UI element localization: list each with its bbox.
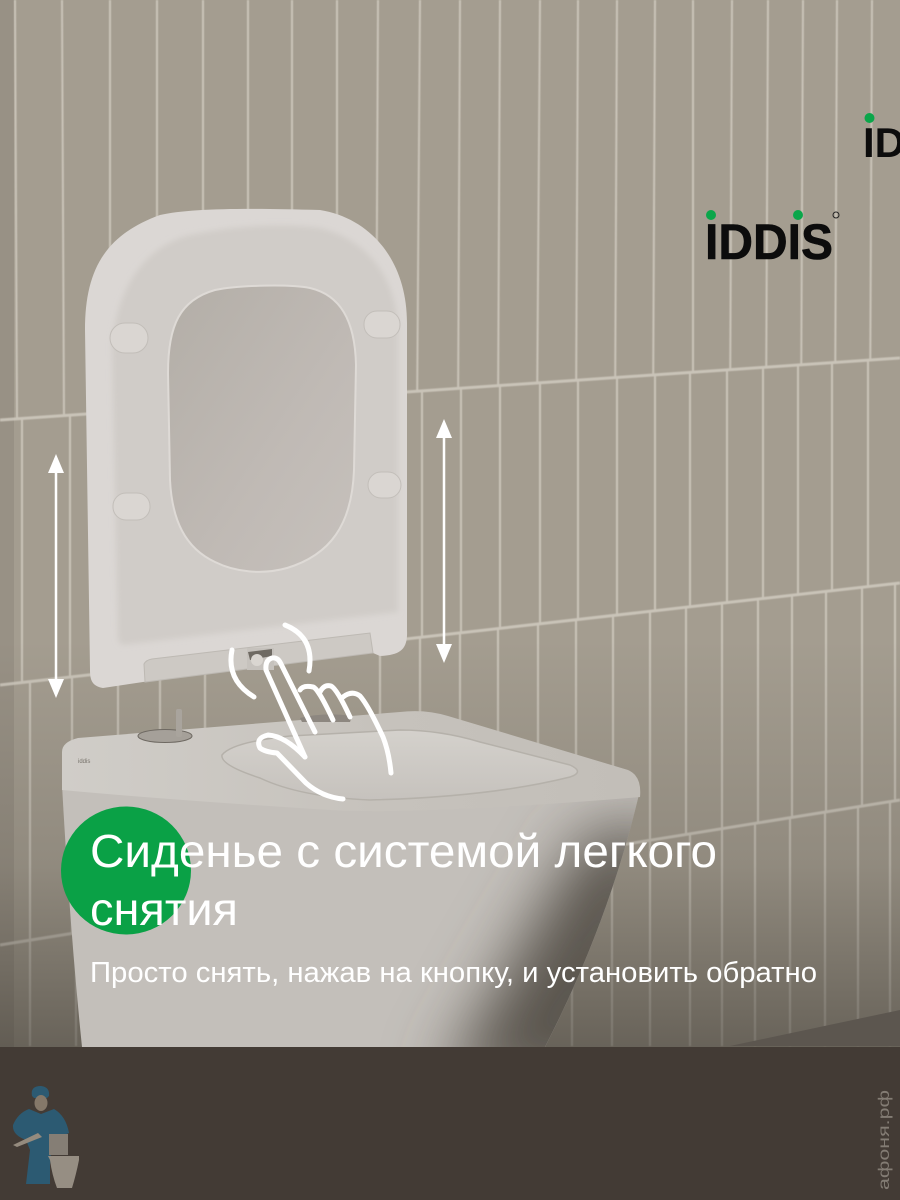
icon: double arrow right xyxy=(436,419,452,663)
icon: pressing hand xyxy=(231,625,391,799)
green circle accent xyxy=(61,806,191,934)
raised toilet seat xyxy=(85,209,407,688)
release button xyxy=(247,648,274,670)
brand mark on rim: iddis xyxy=(78,759,90,765)
subtitle: Просто снять, нажав на кнопку, и установить обратно xyxy=(90,957,817,989)
seat hinge strip xyxy=(144,633,373,682)
toilet bowl xyxy=(62,709,640,1047)
title: снятия xyxy=(90,883,238,935)
flush button xyxy=(138,709,192,742)
seat opening xyxy=(168,286,356,572)
chrome fixing xyxy=(300,714,352,722)
bottom band xyxy=(0,1047,900,1200)
icon: double arrow left xyxy=(48,454,64,698)
logo: IDDIS main: IDDIS xyxy=(705,214,833,270)
title xyxy=(90,825,717,935)
title: Сиденье с системой легкого xyxy=(90,825,717,877)
icon: plumber with toilet xyxy=(13,1086,79,1188)
seat bumpers xyxy=(110,311,401,520)
watermark: афоня.рф xyxy=(876,1090,893,1190)
bowl opening xyxy=(222,730,578,800)
